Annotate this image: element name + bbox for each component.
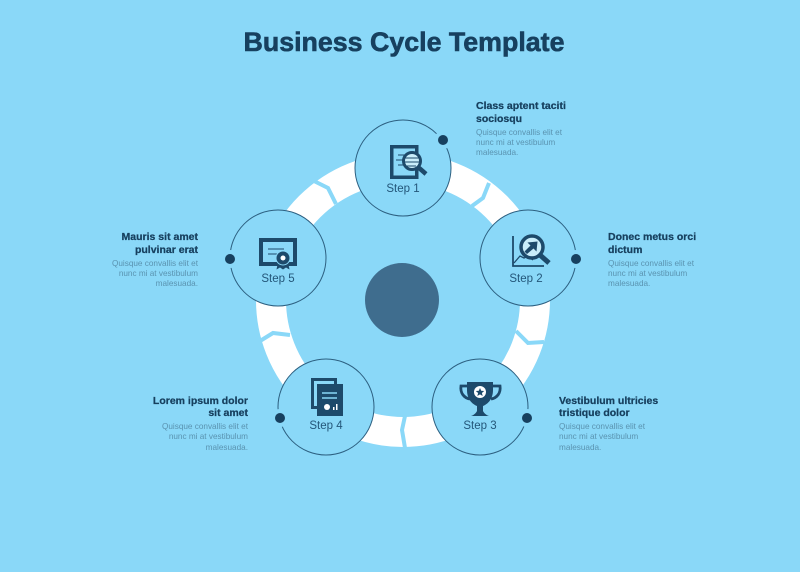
text block: step 5: Mauris sit amet (122, 231, 198, 243)
label: step 2: Step 2 (509, 273, 543, 285)
step 4 node (271, 359, 374, 455)
text block: step 5 (112, 231, 199, 288)
text block: step 1: malesuada. (476, 148, 518, 157)
title: Business Cycle Template (244, 27, 564, 57)
text block: step 2: malesuada. (608, 279, 650, 288)
text block: step 3 (559, 395, 658, 452)
text block: step 3: malesuada. (559, 443, 601, 452)
text block: step 3: nunc mi at vestibulum (559, 432, 638, 441)
icon: trophy (461, 382, 500, 416)
icon: document with magnifier (392, 147, 426, 177)
text block: step 4: Lorem ipsum dolor (153, 395, 248, 407)
label: step 3: Step 3 (463, 420, 497, 432)
text block: step 1: sociosqu (476, 113, 522, 125)
text block: step 2 (608, 231, 696, 288)
text block: step 1: Class aptent taciti (476, 100, 566, 112)
step 1 node (355, 120, 452, 216)
text block: step 2: Quisque convallis elit et (608, 259, 695, 268)
text block: step 4 (153, 395, 249, 452)
step 2 node (480, 210, 585, 306)
text block: step 1 (476, 100, 566, 157)
text block: step 2: dictum (608, 244, 642, 256)
text block: step 4: nunc mi at vestibulum (169, 432, 248, 441)
label: step 4: Step 4 (309, 420, 343, 432)
text block: step 5: malesuada. (156, 279, 198, 288)
text block: step 4: malesuada. (206, 443, 248, 452)
label: step 1: Step 1 (386, 183, 420, 195)
icon: documents (312, 380, 343, 416)
text block: step 3: Vestibulum ultricies (559, 395, 658, 407)
label: step 5: Step 5 (261, 273, 295, 285)
step 3 node (432, 359, 536, 455)
text block: step 5: nunc mi at vestibulum (119, 269, 198, 278)
text block: step 5: pulvinar erat (135, 244, 198, 256)
text block: step 3: tristique dolor (559, 407, 630, 419)
center circle (365, 263, 439, 337)
icon: certificate (261, 240, 295, 270)
icon: chart with magnifier (513, 236, 549, 266)
text block: step 4: Quisque convallis elit et (162, 422, 249, 431)
text block: step 4: sit amet (208, 407, 248, 419)
text block: step 5: Quisque convallis elit et (112, 259, 199, 268)
text block: step 2: nunc mi at vestibulum (608, 269, 687, 278)
text block: step 3: Quisque convallis elit et (559, 422, 646, 431)
text block: step 2: Donec metus orci (608, 231, 696, 243)
text block: step 1: nunc mi at vestibulum (476, 138, 555, 147)
step 5 node (221, 210, 326, 306)
text block: step 1: Quisque convallis elit et (476, 128, 563, 137)
cycle ring (260, 168, 544, 448)
